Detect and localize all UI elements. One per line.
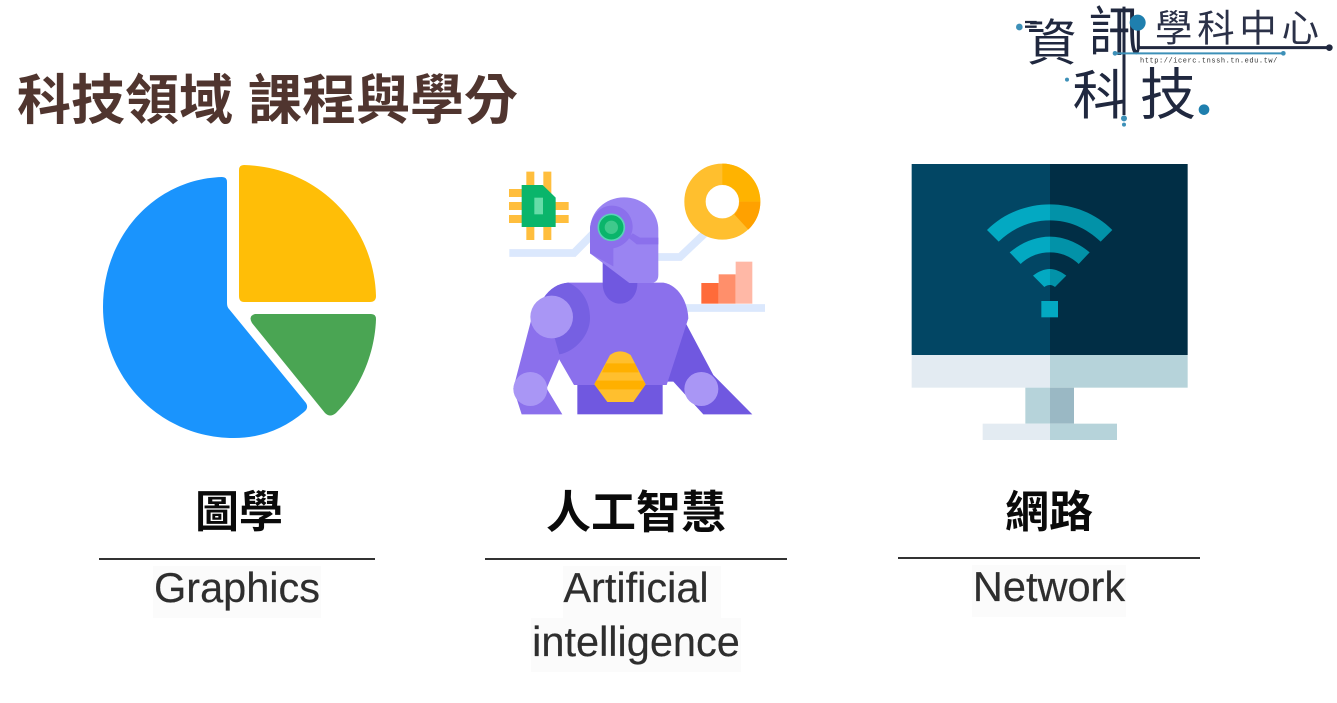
robot torso — [543, 283, 688, 385]
text: Artificial intelligence: intelligence — [532, 618, 740, 665]
label: graphics — [99, 488, 375, 611]
title: 科技領域 課程與學分 — [17, 71, 518, 131]
text background — [972, 565, 1126, 617]
robot neck — [603, 258, 637, 304]
text background — [153, 566, 321, 618]
stand — [1025, 388, 1050, 424]
divider — [99, 558, 375, 560]
logo: 資訊科技學科中心: 技 — [1140, 64, 1196, 127]
wifi symbol — [987, 204, 1112, 317]
robot arms — [513, 312, 562, 414]
divider — [485, 558, 787, 560]
logo: 資訊科技學科中心: http://icerc.tnssh.tn.edu.tw/ — [1140, 58, 1277, 66]
robot head — [590, 197, 658, 283]
logo: 資訊科技學科中心: 訊 — [1088, 4, 1142, 63]
divider — [898, 557, 1200, 559]
heading: 圖學: 圖學 — [195, 488, 283, 537]
heading: 人工智慧: 人工智慧 — [546, 487, 726, 538]
text: Artificial intelligence: Artificial — [563, 564, 709, 611]
bezel — [912, 355, 1050, 388]
connector lines — [509, 230, 765, 308]
robot core — [594, 351, 646, 402]
bar chart — [701, 262, 752, 304]
pie slice: yellow — [239, 165, 376, 302]
pie slice: green — [251, 314, 376, 416]
text: Graphics: Graphics — [154, 564, 320, 611]
label: artificial intelligence — [485, 487, 787, 665]
logo: 資訊科技學科中心: 資 — [1027, 16, 1077, 72]
pie slice: blue — [103, 177, 307, 438]
label: network — [898, 488, 1200, 610]
heading: 網路: 網路 — [1005, 488, 1093, 537]
text: Network: Network — [973, 563, 1125, 610]
donut chart — [695, 164, 760, 230]
logo: 資訊科技學科中心: 科 — [1073, 67, 1126, 126]
text: Artificial intelligence — [532, 564, 740, 665]
chip — [509, 172, 569, 240]
logo: 資訊科技學科中心: 學科中心 — [1155, 8, 1319, 50]
text background — [563, 566, 721, 618]
robot joints — [530, 296, 573, 338]
screen — [912, 164, 1050, 355]
robot hips — [577, 382, 663, 414]
text background — [531, 618, 741, 672]
